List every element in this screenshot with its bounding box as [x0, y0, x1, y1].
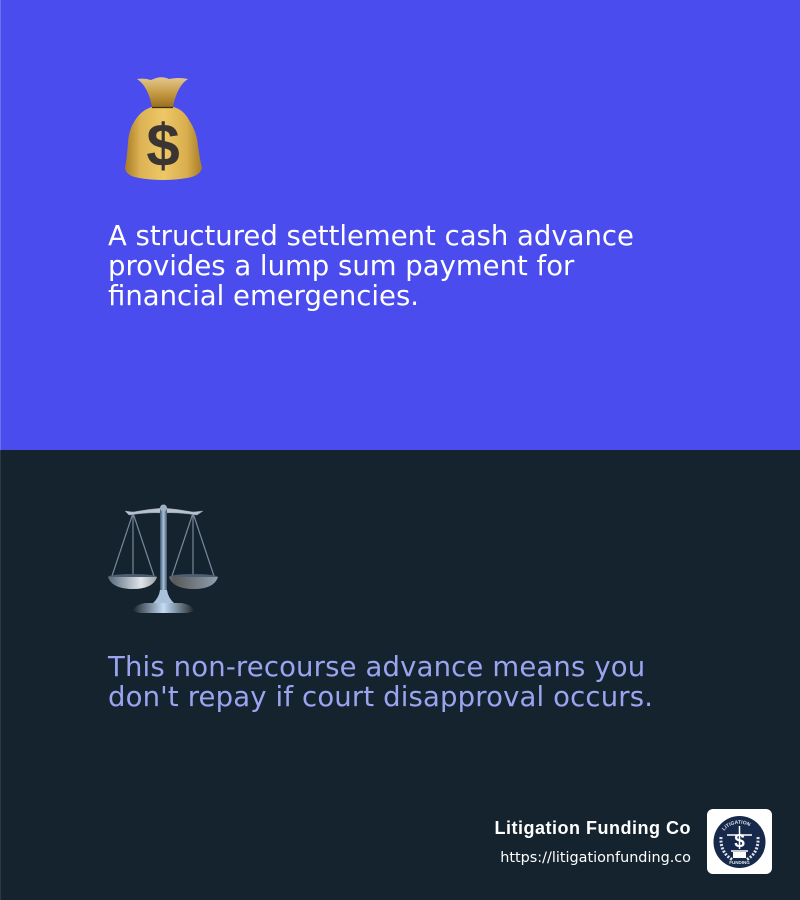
dollar sign: $ — [146, 112, 180, 179]
pans — [108, 574, 157, 580]
stand — [152, 590, 175, 604]
text: company name: Litigation Funding Co — [495, 818, 691, 838]
text: bottom statement — [108, 651, 653, 713]
icon: money bag — [125, 77, 202, 180]
text: bottom statement: don't repay if court disapproval occurs. — [108, 681, 653, 713]
text: top statement — [108, 220, 634, 312]
pillar — [160, 509, 167, 592]
beam — [125, 508, 203, 515]
bag body — [125, 107, 202, 180]
logo: litigation funding badge: $ — [734, 831, 745, 852]
logo: litigation funding badge — [707, 809, 772, 874]
icon: balance scales — [108, 504, 218, 613]
scale strings — [112, 513, 214, 576]
text: bottom statement: This non-recourse advance means you — [108, 651, 645, 683]
text: top statement: provides a lump sum payment for — [108, 250, 574, 282]
text: top statement: A structured settlement cash advance — [108, 220, 634, 252]
text: top statement: financial emergencies. — [108, 280, 419, 312]
logo: litigation funding badge: LITIGATION — [722, 820, 751, 831]
bag neck — [137, 77, 188, 107]
branding: company name and URL — [495, 818, 691, 866]
panel: bottom dark section — [0, 450, 800, 900]
logo: litigation funding badge: FUNDING — [729, 860, 750, 865]
text: URL: https://litigationfunding.co — [500, 850, 691, 866]
panel: top blue section — [0, 0, 800, 450]
